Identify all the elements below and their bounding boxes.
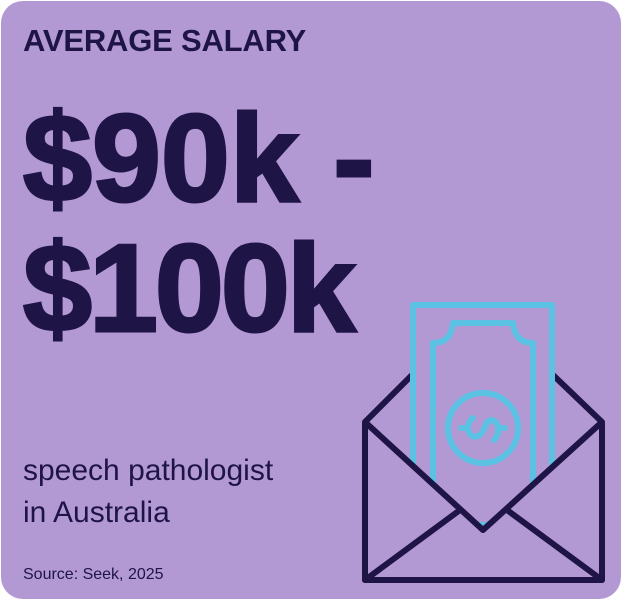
bill xyxy=(413,305,552,525)
envelope front xyxy=(365,422,602,580)
description xyxy=(23,454,273,529)
description: speech pathologist xyxy=(23,454,273,487)
big number line 1: $90k - xyxy=(23,90,375,228)
back flap xyxy=(365,374,602,422)
big number line 2: $100k xyxy=(23,220,353,358)
source: Source: Seek, 2025 xyxy=(23,566,164,583)
heading: AVERAGE SALARY xyxy=(23,23,306,58)
description: in Australia xyxy=(23,496,170,529)
